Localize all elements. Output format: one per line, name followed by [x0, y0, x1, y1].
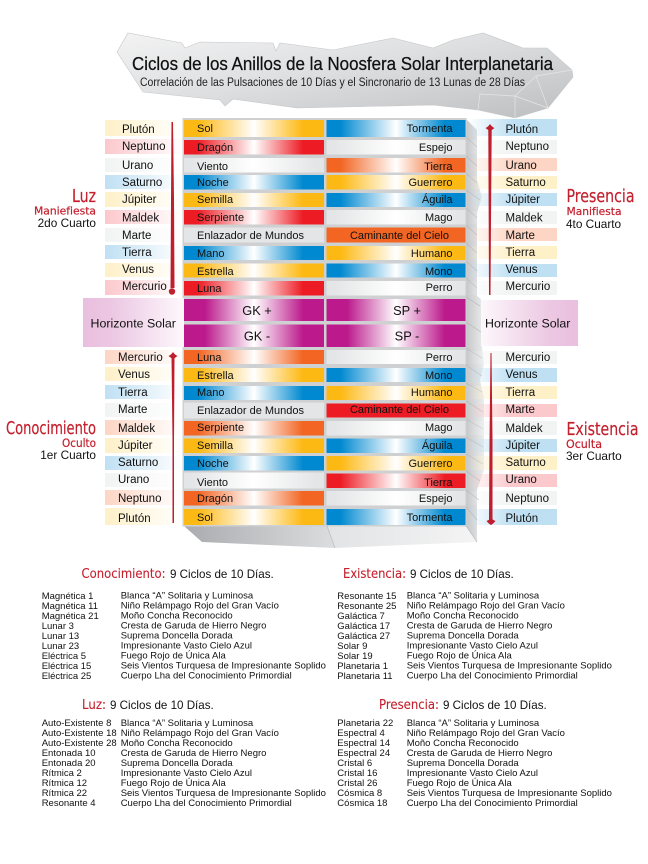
bar labels, right column: Perro	[426, 352, 452, 364]
bar: Noche lower	[184, 456, 324, 470]
bar: Guerrero lower	[326, 456, 466, 470]
cycle list: Conocimiento: Cresta de Garuda de Hierro Negro	[121, 620, 266, 632]
planet list: bottom left: Urano	[118, 474, 149, 486]
bar labels, right column: Águila	[422, 439, 453, 452]
cycle list: Existencia: Cuerpo Lha del Conocimiento Primordial	[407, 670, 578, 682]
side label: Luz: Luz	[72, 186, 96, 207]
bar labels, right column: Tierra	[424, 477, 453, 489]
left symbol column	[184, 120, 324, 525]
horizonte solar right: Horizonte Solar	[485, 316, 570, 330]
cycle list: Presencia: Impresionante Vasto Cielo Azul	[407, 768, 538, 779]
planet list: top left: Júpiter	[122, 194, 157, 206]
bar labels, right column: Mago	[425, 212, 452, 224]
bar: Dragón	[184, 140, 324, 154]
cycle list: Existencia	[337, 590, 612, 682]
bar: GK +	[184, 299, 324, 321]
side label: Presencia: Manifiesta	[566, 205, 622, 218]
bar: Tormenta lower	[326, 509, 466, 525]
bar: Luna lower	[184, 350, 324, 364]
planet list: top right: Saturno	[506, 177, 546, 189]
cycle list: Conocimiento: Impresionante Vasto Cielo Azul	[121, 640, 252, 652]
planet list: top left: Tierra	[122, 247, 152, 259]
bar labels, left column: Viento	[197, 477, 228, 489]
block side creases	[327, 137, 483, 548]
banner rock shape	[117, 33, 573, 118]
cycle list: Conocimiento: Moño Concha Reconocido	[121, 610, 233, 622]
cycle list: Luz: Rítmica 2	[42, 768, 82, 779]
planet list: bottom right: Saturno	[506, 457, 546, 469]
section heading: Presencia	[379, 698, 547, 713]
bar: Espejo	[326, 140, 466, 154]
block bottom left face	[184, 526, 335, 548]
galactic and solar kin labels: GK +	[242, 303, 272, 318]
bar: Estrella	[184, 264, 324, 278]
subtitle: Correlación de las Pulsaciones de 10 Días y el Sincronario de 13 Lunas de 28 Días	[140, 77, 525, 89]
bar labels, right column: Mono	[425, 370, 452, 382]
banner facets	[478, 70, 572, 118]
cycle list: Luz: Resonante 4	[42, 798, 96, 809]
cycle list: Presencia: Cresta de Garuda de Hierro Negro	[407, 748, 552, 759]
bar labels, left column	[197, 123, 305, 524]
bar labels, right column: Humano	[411, 248, 452, 260]
bar labels, left column: Enlazador de Mundos	[197, 405, 305, 417]
bar labels, left column: Dragón	[197, 142, 233, 154]
cycle list: Presencia: Planetaria 22	[337, 718, 393, 729]
cycle list: Existencia: Blanca “A” Solitaria y Luminosa	[407, 590, 540, 602]
bar: Semilla	[184, 193, 324, 207]
cycle list: Existencia: Fuego Rojo de Única Ala	[407, 650, 513, 662]
cycle list: Luz: Auto-Existente 18	[42, 728, 117, 739]
planet list: top right: Mercurio	[506, 281, 550, 293]
cycle list: Presencia: Cristal 6	[337, 758, 372, 769]
cycle list: Existencia: Suprema Doncella Dorada	[407, 630, 519, 642]
cycle list: Conocimiento: Eléctrica 5	[42, 651, 86, 662]
cycle list: Presencia: Espectral 4	[337, 728, 385, 739]
section heading: Luz: Luz:	[82, 698, 106, 713]
cycle list: Conocimiento: Seis Vientos Turquesa de Impresionante Soplido	[121, 660, 326, 672]
side label: Conocimiento: Oculto	[62, 436, 96, 450]
cycle list: Existencia: Impresionante Vasto Cielo Azul	[407, 640, 538, 652]
arrow: top left, pointing down	[169, 122, 175, 295]
planet list: bottom right: Venus	[506, 369, 538, 381]
cycle list: Conocimiento: Lunar 3	[42, 621, 74, 632]
cycle list: Conocimiento: Lunar 23	[42, 641, 79, 652]
cycle list: Luz: Suprema Doncella Dorada	[121, 758, 233, 769]
cycle list: Luz: Rítmica 22	[42, 788, 87, 799]
side label: Existencia	[566, 419, 638, 463]
bar labels, right column: Mago	[425, 422, 452, 434]
bar: Humano lower	[326, 386, 466, 400]
horizonte solar left: Horizonte Solar	[90, 316, 176, 330]
bar labels, right column: Guerrero	[408, 458, 452, 470]
cycle list: Conocimiento: Eléctrica 25	[42, 671, 91, 682]
bar labels, right column: Tierra	[424, 161, 453, 173]
bar labels, right column	[350, 123, 453, 524]
galactic and solar kin labels	[242, 303, 421, 344]
bar: Sol lower	[184, 509, 324, 525]
planet list: top right	[467, 119, 557, 295]
cycle list: Existencia: Resonante 15	[337, 591, 396, 602]
cycle list: Conocimiento: Magnética 21	[42, 611, 99, 622]
cycle list: Presencia: Cósmica 8	[337, 788, 382, 799]
bar labels, left column: Sol	[197, 512, 213, 524]
cycle list: Luz: Cresta de Garuda de Hierro Negro	[121, 748, 266, 759]
cycle list: Existencia: Planetaria 1	[337, 661, 388, 672]
cycle list: Existencia: Moño Concha Reconocido	[407, 610, 519, 622]
bar: Mono	[326, 264, 466, 278]
planet list: bottom left: Tierra	[118, 387, 148, 399]
bar labels, right column: Mono	[425, 266, 452, 278]
section heading: Luz: 9 Ciclos de 10 Días.	[110, 699, 214, 712]
cycle list: Existencia: Cresta de Garuda de Hierro Negro	[407, 620, 552, 632]
cycle list: Luz: Cuerpo Lha del Conocimiento Primordial	[121, 798, 292, 809]
horizonte solar left	[83, 298, 184, 347]
section heading: Conocimiento: Conocimiento:	[82, 567, 166, 582]
block right side face	[465, 118, 484, 542]
section heading: Existencia: 9 Ciclos de 10 Días.	[410, 568, 514, 581]
planet list: bottom right: Júpiter	[506, 440, 540, 452]
block front background	[182, 118, 466, 526]
cycle list: Existencia: Solar 19	[337, 651, 373, 662]
bar labels, left column: Serpiente	[197, 212, 244, 224]
cycle list: Conocimiento: Blanca “A” Solitaria y Luminosa	[121, 590, 254, 602]
bar labels, left column: Estrella	[197, 266, 235, 278]
bar: Águila	[326, 193, 466, 207]
arrow: bottom left, pointing up	[168, 352, 178, 523]
cycle list: Luz: Moño Concha Reconocido	[121, 738, 233, 749]
bar: Serpiente	[184, 210, 324, 224]
planet list: top left	[105, 120, 183, 295]
planet list: top right: Venus	[506, 264, 538, 276]
planet list: bottom left	[105, 350, 183, 525]
bar: Humano	[326, 246, 466, 260]
cycle list: Luz: Auto-Existente 8	[42, 718, 111, 729]
planet list: bottom left: Neptuno	[118, 493, 161, 505]
bar labels, left column: Luna	[197, 283, 222, 295]
bar labels, right column: Espejo	[419, 493, 452, 505]
cycle list: Luz: Niño Relámpago Rojo del Gran Vacío	[121, 728, 279, 739]
arrow: bottom right, pointing down	[486, 353, 496, 525]
side label: Luz: 2do Cuarto	[38, 216, 96, 230]
bar: Mano lower	[184, 386, 324, 400]
bar: Enlazador de Mundos	[184, 228, 324, 242]
galactic and solar kin labels: GK -	[244, 328, 270, 344]
planet list: top right: Júpiter	[506, 194, 540, 206]
bar labels, left column: Semilla	[197, 194, 234, 206]
main title: Ciclos de los Anillos de la Noosfera Solar Interplanetaria	[132, 53, 554, 74]
planet list: bottom right: Mercurio	[506, 352, 550, 364]
cycle list: Presencia: Niño Relámpago Rojo del Gran Vacío	[407, 728, 565, 739]
planet list: bottom left: Mercurio	[118, 352, 163, 364]
planet list: bottom left: Júpiter	[118, 440, 153, 452]
bar: Tormenta	[326, 120, 466, 137]
cycle list: Presencia: Cuerpo Lha del Conocimiento Primordial	[407, 798, 578, 809]
section heading: Existencia: Existencia:	[343, 567, 406, 582]
cycle list: Existencia: Niño Relámpago Rojo del Gran Vacío	[407, 600, 565, 612]
side label: Presencia	[566, 186, 634, 231]
cycle list: Existencia: Solar 9	[337, 641, 367, 652]
bar: Tierra	[326, 158, 466, 172]
bar labels, left column: Luna	[197, 352, 222, 364]
bar labels, right column: Guerrero	[408, 177, 452, 189]
side label: Existencia: Oculta	[566, 437, 602, 451]
cycle list: Conocimiento: Eléctrica 15	[42, 661, 91, 672]
bar labels, left column: Sol	[197, 123, 213, 135]
planet list: top left: Saturno	[122, 177, 162, 189]
bar: Mano	[184, 246, 324, 260]
planet list: top left: Maldek	[122, 212, 159, 224]
cycle list: Presencia: Espectral 24	[337, 748, 390, 759]
planet list: bottom right: Tierra	[506, 387, 536, 399]
galactic and solar kin labels: SP -	[395, 328, 419, 344]
cycle list: Luz: Blanca “A” Solitaria y Luminosa	[121, 718, 254, 729]
cycle list: Luz: Entonada 10	[42, 748, 96, 759]
cycle list: Existencia: Resonante 25	[337, 601, 396, 612]
cycle list: Presencia	[337, 718, 612, 809]
planet list: bottom right: Maldek	[506, 423, 543, 435]
planet list: top left: Neptuno	[122, 141, 165, 153]
3D block frame	[182, 118, 484, 548]
bar labels, left column: Noche	[197, 177, 229, 189]
arrow: top right, pointing up	[486, 124, 494, 295]
bar: Viento lower	[184, 472, 324, 488]
cycle list: Luz: Rítmica 12	[42, 778, 87, 789]
planet list: top left: Plutón	[122, 124, 155, 136]
bar: Estrella lower	[184, 368, 324, 382]
bar labels, right column: Águila	[422, 193, 453, 206]
bar labels, left column: Semilla	[197, 440, 234, 452]
bar: Espejo lower	[326, 491, 466, 506]
bar: Mono lower	[326, 368, 466, 382]
bar: Mago lower	[326, 421, 466, 436]
cycle list: Conocimiento: Niño Relámpago Rojo del Gran Vacío	[121, 600, 279, 612]
cycle list: Luz: Seis Vientos Turquesa de Impresionante Soplido	[121, 788, 326, 799]
side label: Conocimiento: 1er Cuarto	[40, 448, 96, 462]
bar: Enlazador lower	[184, 402, 324, 418]
cycle list: Luz: Entonada 20	[42, 758, 96, 769]
planet list: bottom right: Urano	[506, 474, 537, 486]
cycle list: Presencia: Blanca “A” Solitaria y Luminosa	[407, 718, 540, 729]
cycle list: Conocimiento: Lunar 13	[42, 631, 79, 642]
bar: Perro lower	[326, 350, 466, 364]
block bottom right face	[327, 526, 477, 548]
planet list: top right: Neptuno	[506, 141, 549, 153]
bar: Caminante lower	[326, 404, 466, 418]
bar labels, right column: Tormenta	[407, 123, 453, 135]
bar: Caminante del Cielo	[326, 228, 466, 242]
cycle list: Presencia: Seis Vientos Turquesa de Impresionante Soplido	[407, 788, 612, 799]
bar: Viento	[184, 158, 324, 172]
bar: Perro	[326, 281, 466, 296]
bar: Águila lower	[326, 438, 466, 453]
bar labels, left column: Estrella	[197, 370, 235, 382]
horizonte solar right	[481, 300, 578, 346]
planet list: bottom right	[467, 351, 557, 525]
bar: Noche	[184, 175, 324, 190]
cycle list: Presencia: Espectral 14	[337, 738, 390, 749]
bar: SP -	[326, 324, 466, 347]
cycle list: Conocimiento: Fuego Rojo de Única Ala	[121, 650, 227, 662]
planet list: bottom right: Neptuno	[506, 493, 549, 505]
cycle list: Existencia: Galáctica 17	[337, 621, 390, 632]
bar labels, left column: Mano	[197, 387, 225, 399]
bar: SP +	[326, 299, 466, 321]
bar: Tierra lower	[326, 474, 466, 488]
bar labels, left column: Serpiente	[197, 422, 244, 434]
bar: GK -	[184, 324, 324, 347]
planet list: bottom left: Maldek	[118, 423, 155, 435]
planet list: top right: Marte	[506, 230, 535, 242]
section heading: Conocimiento	[82, 567, 274, 582]
bar: Semilla lower	[184, 438, 324, 453]
bar: Sol	[184, 120, 324, 137]
bar labels, right column: Humano	[411, 387, 452, 399]
cycle list: Presencia: Cósmica 18	[337, 798, 387, 809]
cycle list: Conocimiento: Cuerpo Lha del Conocimiento Primordial	[121, 670, 292, 682]
planet list: bottom left: Plutón	[118, 513, 151, 525]
side label: Luz: Maniefiesta	[34, 204, 96, 218]
bar: Mago	[326, 210, 466, 224]
section heading: Presencia: 9 Ciclos de 10 Días.	[443, 699, 547, 712]
cycle list: Presencia: Suprema Doncella Dorada	[407, 758, 519, 769]
planet list: bottom right: Plutón	[506, 513, 538, 525]
bar labels, right column: Espejo	[419, 142, 452, 154]
bar labels, left column: Mano	[197, 248, 225, 260]
cycle list: Presencia: Fuego Rojo de Única Ala	[407, 778, 513, 789]
planet list: top left: Venus	[122, 264, 154, 276]
cycle list: Conocimiento: Magnética 11	[42, 601, 98, 612]
cycle list: Presencia: Moño Concha Reconocido	[407, 738, 519, 749]
planet list: top left: Mercurio	[122, 281, 167, 293]
planet list: bottom left: Saturno	[118, 457, 158, 469]
section heading: Luz	[82, 698, 214, 713]
right symbol column	[326, 120, 466, 525]
cycle list: Luz: Impresionante Vasto Cielo Azul	[121, 768, 252, 779]
bar labels, right column: Tormenta	[407, 512, 453, 524]
cycle list: Presencia: Cristal 26	[337, 778, 377, 789]
planet list: top right: Plutón	[506, 124, 538, 136]
bar labels, left column: Dragón	[197, 493, 233, 505]
planet list: top right: Urano	[506, 160, 537, 172]
bar labels, right column: Caminante del Cielo	[350, 404, 449, 416]
side label: Existencia: 3er Cuarto	[566, 449, 622, 463]
section heading: Presencia: Presencia:	[379, 698, 439, 713]
bar labels, right column: Perro	[426, 282, 452, 294]
planet list: top right: Tierra	[506, 247, 536, 259]
cycle list: Luz: Fuego Rojo de Única Ala	[121, 778, 227, 789]
cycle list: Existencia: Seis Vientos Turquesa de Impresionante Soplido	[407, 660, 612, 672]
cycle list: Existencia: Galáctica 7	[337, 611, 385, 622]
side label: Luz	[34, 186, 96, 230]
cycle list: Existencia: Planetaria 11	[337, 671, 393, 682]
bar: Serpiente lower	[184, 421, 324, 436]
bar labels, right column: Caminante del Cielo	[350, 230, 449, 242]
title banner	[117, 33, 573, 118]
bar: Luna	[184, 281, 324, 296]
cycle list: Luz	[42, 718, 326, 809]
galactic and solar kin labels: SP +	[393, 303, 421, 318]
cycle list: Conocimiento: Suprema Doncella Dorada	[121, 630, 233, 642]
side label: Conocimiento	[6, 418, 96, 462]
cycle list: Conocimiento	[42, 590, 326, 682]
planet list: bottom left: Marte	[118, 404, 147, 416]
planet list: top left: Urano	[122, 160, 153, 172]
bar: Guerrero	[326, 175, 466, 190]
side label: Conocimiento: Conocimiento	[6, 418, 96, 439]
side label: Presencia: 4to Cuarto	[566, 217, 622, 231]
bar labels, left column: Enlazador de Mundos	[197, 230, 305, 242]
section heading: Existencia	[343, 567, 514, 582]
bar labels, left column: Viento	[197, 161, 228, 173]
bar: Dragón lower	[184, 491, 324, 506]
cycle list: Conocimiento: Magnética 1	[42, 591, 93, 602]
planet list: bottom left: Venus	[118, 369, 150, 381]
bar labels, left column: Noche	[197, 458, 229, 470]
planet list: bottom right: Marte	[506, 404, 535, 416]
planet list: top left: Marte	[122, 230, 151, 242]
cycle list: Presencia: Cristal 16	[337, 768, 377, 779]
section heading: Conocimiento: 9 Ciclos de 10 Días.	[170, 568, 274, 581]
cycle list: Existencia: Galáctica 27	[337, 631, 390, 642]
cycle list: Luz: Auto-Existente 28	[42, 738, 117, 749]
planet list: top right: Maldek	[506, 212, 543, 224]
